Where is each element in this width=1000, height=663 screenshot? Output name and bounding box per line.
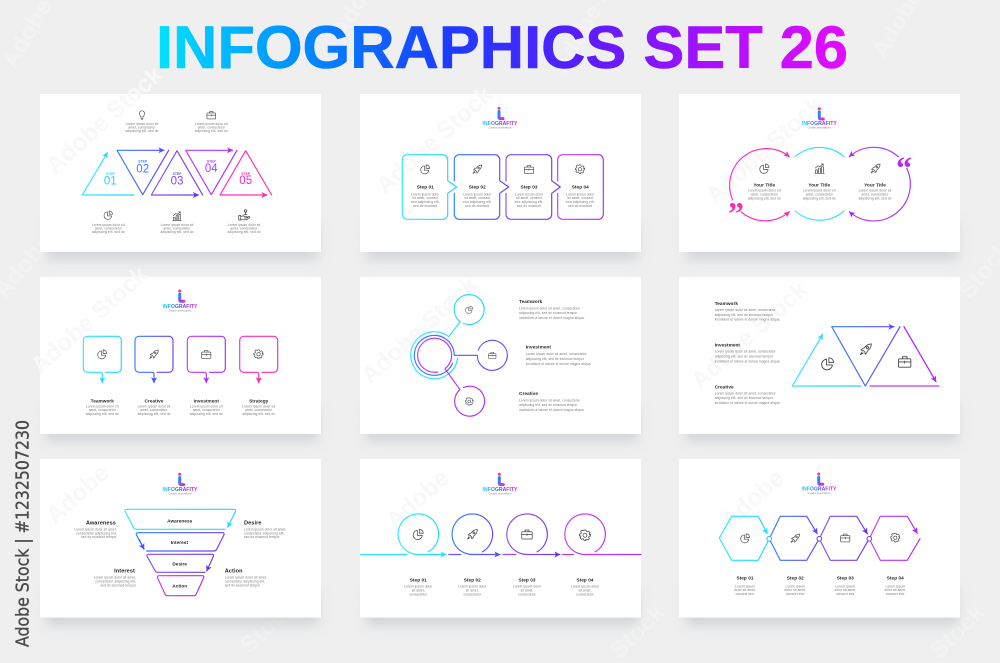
Creative text: Lorem ipsum dolor sit amet, consectetur	[715, 391, 777, 395]
Interest side text: Interest	[114, 569, 135, 575]
logo: INFOGRAFITY	[802, 121, 837, 127]
icon: pie	[466, 306, 473, 313]
step 02 text: dolor sit amet,	[784, 588, 806, 592]
step 02 text: Step 02	[469, 184, 486, 189]
caption top left: amet, consectetur	[128, 125, 156, 129]
Desire side text: consectetur adipiscing elit,	[244, 531, 284, 535]
icon: gear	[580, 530, 590, 540]
Creative text: incididunt ut labore et dolore magna aliqua.	[519, 408, 585, 412]
icon: briefcase	[207, 111, 216, 119]
Teamwork text	[86, 399, 119, 416]
icon: briefcase	[899, 357, 911, 367]
icon: pie	[741, 534, 750, 543]
Strategy text: adipiscing elit, sed do	[242, 412, 275, 416]
icon: chart	[173, 212, 181, 220]
icon: pie	[413, 529, 423, 540]
Strategy text	[242, 399, 275, 416]
step 02 text: Lorem ipsum dolor	[458, 584, 487, 588]
triangle 2	[117, 150, 169, 195]
funnel layer 4	[157, 576, 204, 596]
hexagon 1	[719, 516, 769, 560]
step 01 text: Lorem ipsum	[735, 584, 755, 588]
caption top right: amet, consectetur	[198, 125, 226, 129]
step 04 text	[884, 575, 906, 596]
step 02 text: Step 02	[464, 577, 481, 582]
centre circle arcs	[795, 147, 844, 220]
step 03 text: Step 03	[520, 184, 538, 189]
panel: funnel: Adobe	[41, 459, 115, 529]
logo	[802, 472, 837, 495]
step 03 text: consect etur	[836, 592, 855, 596]
step 03 text: Lorem ipsum dolor	[515, 192, 544, 196]
Creative text: adipiscing elit, sed do	[137, 412, 171, 416]
step 03 text	[834, 575, 856, 596]
Investment text: Investment	[526, 345, 551, 350]
purple ring and bottom circle	[418, 338, 485, 416]
step 03 label: 03	[171, 176, 183, 188]
icon: gear	[465, 398, 473, 405]
step 01 text: Step 01	[410, 577, 427, 582]
callout 3	[187, 336, 225, 383]
Action layer label: Action	[172, 584, 187, 589]
background watermarks: Stock	[925, 598, 991, 663]
caption top left: Lorem ipsum dolor sit	[126, 122, 158, 126]
funnel layer 2	[136, 533, 224, 551]
step 03 text: sit amet, consect	[516, 196, 542, 200]
step 04 text: sit amet,	[578, 588, 592, 592]
step 04 text: Lorem ipsum dolor	[566, 192, 595, 196]
circle 1	[398, 514, 446, 554]
step 03 text: Lorem ipsum dolor	[513, 584, 542, 588]
title 3 text	[858, 182, 892, 200]
step 01 text: sed do eiusmod	[413, 204, 437, 208]
Interest side text	[94, 569, 137, 587]
Creative text: Creative	[145, 399, 164, 404]
step 02 text: sed do eiusmod	[465, 204, 489, 208]
icon: pie	[98, 350, 107, 359]
Action side text: Action	[225, 569, 243, 575]
title 2 text: amet, consectetur	[806, 192, 834, 196]
Awareness side text: Lorem ipsum dolor sit amet,	[74, 528, 117, 532]
connector 4	[562, 554, 573, 556]
caption top right: adipiscing elit, sed do	[195, 129, 228, 133]
purple base line	[870, 385, 939, 387]
step 02 text: Step 02	[787, 575, 804, 580]
step 03 text	[515, 184, 544, 208]
Awareness side text: sed do eiusmod tempor	[81, 535, 118, 539]
caption bottom 1: amet, consectetur	[95, 226, 123, 230]
icon: briefcase	[524, 166, 534, 173]
Strategy text: amet, consectetur	[245, 408, 273, 412]
step 03 text: sed do eiusmod	[517, 204, 541, 208]
Investment text: adipiscing elit, sed do eiusmod tempor	[526, 357, 585, 361]
Teamwork text: Lorem ipsum dolor sit amet, consectetur	[715, 308, 777, 312]
panel: four arrow boxes: Adobe Stock	[371, 81, 499, 199]
step 01 text: consect etur	[736, 592, 755, 596]
title: INFOGRAPHICS SET 26	[156, 14, 848, 81]
title 3 text: adipiscing elit, sed do	[858, 196, 892, 200]
Desire side text: Lorem ipsum dolor sit amet,	[244, 528, 286, 532]
icon: pie	[760, 164, 769, 173]
logo: Creative presentations	[169, 492, 192, 496]
joint 1	[767, 536, 772, 541]
step 03 text: consectetur	[518, 592, 537, 596]
hexagon 3	[819, 516, 869, 560]
Investment text: Lorem ipsum dolor sit amet, consectetur	[526, 352, 588, 356]
circle 3	[507, 514, 560, 554]
panel: four square callouts: Adobe Stock	[26, 261, 154, 379]
step 01 label: STEP	[106, 172, 115, 176]
title 2 text: Your Title	[808, 182, 831, 188]
step 04 text: Step 04	[887, 575, 904, 580]
triangle 5	[220, 151, 272, 195]
joint 2	[817, 536, 822, 541]
step 03 text: Lorem ipsum	[835, 584, 855, 588]
Interest side text: consectetur adipiscing elit,	[96, 580, 136, 584]
step 02 text: consect etur	[786, 592, 805, 596]
Creative text: adipiscing elit, sed do eiusmod tempor	[519, 403, 578, 407]
Investment text: adipiscing elit, sed do eiusmod tempor	[715, 354, 774, 358]
step 04 text: consectetur	[576, 592, 595, 596]
closing quote mark: ”	[728, 195, 744, 231]
circle 4	[565, 514, 641, 554]
box 3	[506, 155, 560, 219]
step 01 text: sit amet, consect	[412, 196, 438, 200]
background watermarks: Stock	[605, 598, 671, 663]
step 04 text: dolor sit amet,	[884, 588, 906, 592]
Teamwork text: Teamwork	[91, 399, 114, 404]
step 02 text	[784, 575, 806, 596]
right circle arcs	[849, 147, 910, 221]
panel: three linked circles: Adobe Stock	[701, 91, 829, 209]
Action side text: sed do eiusmod tempor	[225, 583, 261, 587]
step 01 text: Step 01	[736, 575, 754, 580]
callout 2	[135, 336, 173, 383]
logo: INFOGRAFITY	[162, 487, 198, 493]
caption bottom 1: adipiscing elit, sed do	[92, 230, 125, 234]
background watermarks: Stock	[235, 593, 301, 659]
Interest side text: sed do eiusmod tempor	[100, 583, 137, 587]
Action side text: Lorem ipsum dolor sit amet,	[225, 576, 267, 580]
lead-in line	[360, 554, 407, 556]
step 02 text: etur adipiscing elit,	[463, 200, 492, 204]
Teamwork text: Lorem ipsum dolor sit	[86, 404, 119, 408]
Desire side text: Desire	[244, 521, 262, 527]
icon: rocket	[468, 530, 477, 539]
title 3 text: amet, consectetur	[861, 192, 889, 196]
caption bottom 3: adipiscing elit, sed do	[227, 230, 261, 234]
Action side text	[225, 569, 267, 587]
cyan ring and top circle	[411, 295, 484, 379]
purple side arrow	[904, 327, 936, 382]
Teamwork text: Lorem ipsum dolor sit amet, consectetur	[519, 306, 581, 310]
Investment text	[526, 345, 592, 366]
Teamwork text: incididunt ut labore et dolore magna aliqua.	[715, 318, 781, 322]
Desire side text: sed do eiusmod tempor	[244, 535, 280, 539]
icon: pie	[822, 358, 834, 370]
Investment text	[190, 399, 223, 416]
icon: pie	[421, 165, 430, 174]
Creative text: Creative	[519, 391, 538, 396]
step 04 text: etur adipiscing elit,	[566, 200, 595, 204]
Desire layer label: Desire	[172, 562, 187, 567]
step 04 text: sed do eiusmod	[568, 204, 592, 208]
step 01 text: Step 01	[417, 184, 434, 189]
step 02 text: Lorem ipsum	[785, 584, 805, 588]
step 04 text: Step 04	[576, 577, 594, 582]
icon: hand	[239, 210, 250, 220]
panel: circles on a line: Adobe	[381, 464, 455, 534]
title 2 text	[803, 182, 836, 200]
blue triangle	[832, 327, 900, 386]
logo: Creative presentations	[808, 492, 831, 495]
Investment text	[715, 343, 781, 363]
joint 3	[867, 536, 872, 541]
step 02 text: sit amet,	[466, 588, 479, 592]
step 02 label: STEP	[138, 160, 148, 164]
step 03 text: etur adipiscing elit,	[515, 200, 543, 204]
step 01 text: etur adipiscing elit,	[411, 200, 440, 204]
icon: gear	[254, 350, 263, 359]
panel: three large triangles: Adobe Stock	[686, 276, 814, 394]
Teamwork text: adipiscing elit, sed do	[86, 412, 119, 416]
logo: Creative presentations	[808, 127, 832, 130]
panel: funnel	[40, 459, 321, 618]
hexagon 4	[869, 516, 920, 560]
step 03 text: sit amet,	[520, 588, 534, 592]
icon: rocket	[871, 164, 880, 173]
blue ring and middle circle	[414, 335, 507, 375]
panel: three linked circles	[679, 91, 960, 252]
Awareness layer label: Awareness	[167, 518, 193, 523]
funnel layer 1	[125, 509, 236, 529]
step 02 text: sit amet, consect	[464, 196, 490, 200]
step 01 text	[734, 575, 756, 596]
title 1 text	[748, 182, 781, 200]
panel: hub and three circles	[356, 271, 641, 434]
Strategy text: Lorem ipsum dolor sit	[242, 404, 275, 408]
logo: Creative presentations	[169, 310, 192, 313]
title 3 text: Lorem ipsum dolor sit	[859, 188, 891, 192]
hexagon 2	[769, 516, 819, 560]
Teamwork text	[519, 299, 585, 320]
panel: hexagon chain	[679, 459, 960, 618]
Investment text: Investment	[194, 399, 219, 404]
Investment text: Lorem ipsum dolor sit amet, consectetur	[715, 350, 777, 354]
icon: briefcase	[489, 352, 496, 359]
icon: bulb	[139, 111, 145, 120]
step 04 label: STEP	[207, 160, 216, 164]
step 04 text: sit amet, consect	[567, 196, 593, 200]
step 04 label: 04	[205, 163, 218, 175]
Creative text: amet, consectetur	[140, 408, 168, 412]
Investment text: incididunt ut labore et dolore magna aliqua.	[526, 362, 592, 366]
connector 2	[449, 554, 461, 556]
Interest layer label: Interest	[171, 540, 188, 545]
step 02 text: Lorem ipsum dolor	[463, 192, 492, 196]
step 03 label: STEP	[173, 172, 182, 176]
step 02 label: 02	[136, 164, 149, 176]
step 04 text: Step 04	[572, 184, 589, 189]
step 04 text: Lorem ipsum dolor	[571, 584, 600, 588]
step 01 text: Lorem ipsum dolor	[404, 584, 433, 588]
title 1 text: amet, consectetur	[751, 192, 779, 196]
logo	[162, 473, 198, 496]
Investment text: adipiscing elit, sed do	[190, 412, 223, 416]
Creative text: Lorem ipsum dolor sit	[138, 404, 170, 408]
Investment text: amet, consectetur	[193, 408, 221, 412]
logo: INFOGRAFITY	[482, 487, 518, 493]
triangle 1	[82, 152, 134, 195]
icon: rocket	[791, 534, 800, 542]
stock credit: Adobe Stock | #1232507230	[14, 420, 34, 647]
logo: INFOGRAFITY	[162, 304, 198, 310]
title 1 text: adipiscing elit, sed do	[748, 196, 781, 200]
title 1 text: Lorem ipsum dolor sit	[748, 188, 781, 192]
panel: four square callouts	[26, 261, 321, 434]
connector 3	[503, 554, 516, 556]
Creative text: Lorem ipsum dolor sit amet, consectetur	[519, 398, 581, 402]
Creative text: incididunt ut labore et dolore magna aliqua.	[715, 401, 781, 405]
panel shadows	[46, 222, 958, 626]
icon: chart	[815, 164, 824, 173]
logo	[482, 473, 518, 496]
logo: INFOGRAFITY	[802, 486, 837, 492]
caption top right: Lorem ipsum dolor sit	[195, 122, 228, 126]
step 03 text: dolor sit amet,	[834, 588, 856, 592]
step 02 text: consectetur	[463, 592, 482, 596]
step 03 text: Step 03	[837, 575, 854, 580]
step 04 text: Lorem ipsum	[885, 584, 905, 588]
box 2	[454, 155, 509, 219]
caption bottom 2: amet, consectetur	[163, 226, 191, 230]
Action side text: consectetur adipiscing elit,	[225, 580, 265, 584]
Teamwork text	[715, 301, 781, 322]
callout 4	[240, 336, 278, 383]
opening quote mark: “	[896, 150, 912, 186]
step 01 text: consectetur	[409, 592, 428, 596]
panel: three large triangles	[679, 276, 960, 434]
Creative text	[715, 384, 781, 405]
panel: circles on a line	[360, 459, 641, 618]
Awareness side text	[74, 521, 118, 539]
step 03 text: Step 03	[518, 577, 536, 582]
step 01 text	[411, 184, 440, 208]
caption bottom 2: Lorem ipsum dolor sit	[161, 223, 193, 227]
left circle arcs	[730, 149, 789, 221]
triangle 4	[186, 150, 237, 195]
Teamwork text: amet, consectetur	[89, 408, 117, 412]
box 4	[558, 155, 603, 219]
funnel layer 2 arrow	[139, 539, 144, 549]
caption bottom 1: Lorem ipsum dolor sit	[92, 223, 125, 227]
step 02 text	[463, 184, 492, 208]
title 3 text: Your Title	[864, 182, 886, 188]
icon: rocket	[150, 350, 158, 358]
caption bottom 2: adipiscing elit, sed do	[160, 230, 194, 234]
step 03 text	[513, 577, 542, 596]
icon: briefcase	[522, 530, 532, 539]
icon: rocket	[473, 165, 482, 173]
icon: gear	[575, 165, 585, 174]
icon: pie	[104, 211, 112, 219]
step 05 label: STEP	[241, 172, 251, 176]
Investment text: incididunt ut labore et dolore magna aliqua.	[715, 359, 781, 363]
Teamwork text: adipiscing elit, sed do eiusmod tempor	[519, 311, 578, 315]
panel: four arrow boxes	[360, 81, 641, 252]
panel: hub and three circles: Adobe Stock	[356, 271, 484, 389]
step 02 text	[458, 577, 487, 596]
Awareness side text: consectetur adipiscing elit,	[76, 531, 117, 535]
Teamwork text: Teamwork	[715, 301, 738, 306]
logo	[482, 107, 518, 130]
logo	[162, 290, 198, 313]
funnel layer 3	[147, 554, 214, 572]
icon: briefcase	[202, 351, 211, 358]
callout 1	[83, 336, 121, 383]
Teamwork text: Teamwork	[519, 299, 543, 304]
step 04 text	[571, 577, 600, 596]
Creative text	[137, 399, 171, 416]
caption bottom 3: Lorem ipsum dolor sit	[228, 223, 260, 227]
Desire side text	[244, 521, 286, 539]
cyan triangle	[792, 334, 861, 386]
panel: hexagon chain: Adobe	[716, 464, 790, 534]
step 01 label: 01	[104, 176, 117, 188]
icon: gear	[891, 533, 900, 542]
logo: INFOGRAFITY	[482, 121, 518, 127]
Creative text: Creative	[715, 384, 734, 389]
step 01 text: Lorem ipsum dolor	[411, 192, 440, 196]
step 01 text: dolor sit amet,	[734, 588, 756, 592]
logo: Creative presentations	[489, 127, 512, 130]
Teamwork text: incididunt ut labore et dolore magna aliqua.	[519, 316, 585, 320]
step 01 text: sit amet,	[412, 588, 425, 592]
step 05 label: 05	[239, 175, 252, 187]
circle 2	[452, 514, 500, 554]
panel: triangle steps	[40, 61, 321, 252]
step 04 text	[566, 184, 595, 208]
logo: Creative presentations	[489, 492, 512, 496]
Creative text: adipiscing elit, sed do eiusmod tempor	[715, 396, 774, 400]
logo	[802, 107, 837, 130]
Strategy text: Strategy	[249, 399, 269, 404]
triangle 3	[151, 151, 203, 195]
caption top left: adipiscing elit, sed do	[125, 129, 159, 133]
icon: briefcase	[841, 534, 850, 542]
step 01 text	[404, 577, 433, 596]
Investment text: Investment	[715, 343, 740, 348]
panel: triangle steps: Adobe Stock	[41, 61, 169, 179]
Creative text	[519, 391, 585, 412]
step 04 text: consect etur	[886, 592, 905, 596]
Teamwork text: adipiscing elit, sed do eiusmod tempor	[715, 313, 774, 317]
title 2 text: adipiscing elit, sed do	[803, 196, 836, 200]
box 1	[402, 155, 457, 219]
title 1 text: Your Title	[753, 182, 776, 188]
title 2 text: Lorem ipsum dolor sit	[803, 188, 836, 192]
caption bottom 3: amet, consectetur	[230, 226, 258, 230]
Awareness side text: Awareness	[86, 521, 116, 527]
icon: rocket	[860, 344, 871, 355]
Investment text: Lorem ipsum dolor sit	[190, 404, 223, 408]
Interest side text: Lorem ipsum dolor sit amet,	[94, 576, 136, 580]
